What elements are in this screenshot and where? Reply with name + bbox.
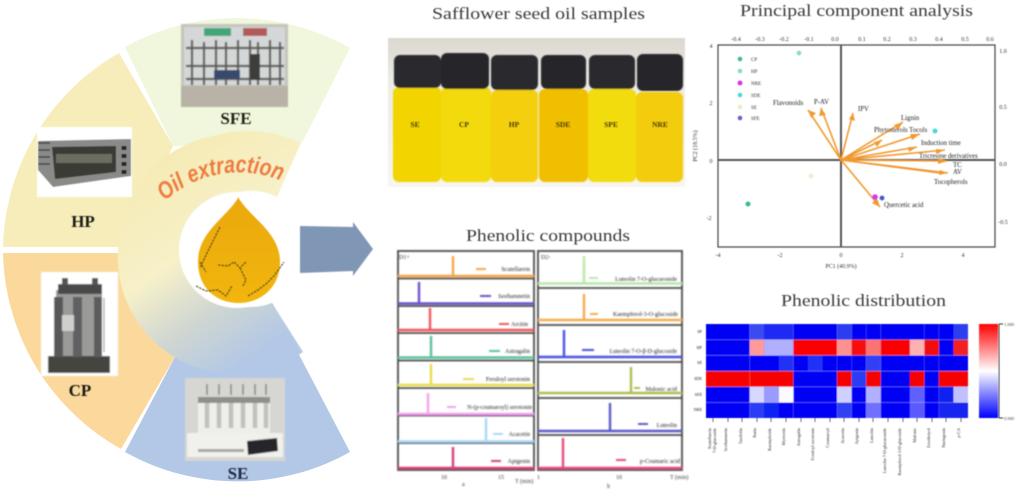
- axis tick labels: PC2 (18.5%): [692, 130, 699, 162]
- chart legend: heatmap colorbar: 0.000: [1004, 416, 1015, 421]
- vial labels: SE: [410, 120, 420, 129]
- title: Phenolic distribution: Phenolic distribution: [781, 291, 947, 310]
- left legends: Isorhamnetin: [498, 294, 530, 300]
- row labels: HP: [697, 345, 703, 350]
- column labels: Malonic: [912, 428, 917, 443]
- vial labels: [410, 120, 668, 129]
- axis tick labels: 0.3: [909, 37, 917, 43]
- right axis labels: [537, 255, 688, 490]
- vial labels: SDE: [556, 120, 570, 129]
- right legends: Luteolin 7-O-glucuronide: [615, 277, 677, 283]
- left legends: N-(p-coumaroyl) serotonin: [467, 404, 532, 411]
- right legends: Luteolin 7-O-β-D-glucoside: [609, 349, 677, 355]
- label: HP: HP: [71, 212, 95, 231]
- photo: HP oven: [37, 127, 132, 197]
- column labels: Feruloyl serotonin: [810, 427, 815, 460]
- left legends: Arctiin: [511, 322, 528, 328]
- left legends: [467, 267, 532, 465]
- chart: phenolic heatmap: [694, 324, 968, 476]
- score points: [797, 51, 801, 55]
- column labels: Scutellarein: [707, 427, 712, 449]
- chart legend: heatmap colorbar: 1.000: [1004, 322, 1015, 327]
- column labels: Apigenin: [854, 427, 859, 444]
- photo background: [388, 38, 685, 187]
- axis tick labels: 2: [710, 101, 712, 107]
- plot frame: [718, 45, 995, 247]
- axis tick labels: PC1 (40.9%): [825, 263, 857, 270]
- sector: HP: [3, 53, 173, 247]
- row labels: SE: [697, 360, 702, 365]
- heatmap row 5: [750, 387, 968, 402]
- sector: SFE: [125, 18, 350, 146]
- axis tick labels: 0.6: [986, 37, 994, 43]
- right legends: p-Coumaric acid: [640, 459, 680, 465]
- axis tick labels: -4: [716, 253, 720, 259]
- axis tick labels: [692, 37, 1008, 270]
- left legends: Scutellarein: [501, 267, 530, 273]
- left legends: Feruloyl serotonin: [486, 377, 530, 383]
- chart: chromatograms left panel: [398, 251, 534, 488]
- right legends: [609, 277, 680, 465]
- column labels: Kaempferide: [767, 428, 772, 451]
- loading labels: Quercetic acid: [884, 202, 924, 209]
- loading labels: Tricresine derivatives: [919, 153, 978, 160]
- heatmap row 4: [706, 371, 968, 387]
- title: Principal component analysis: Principal component analysis: [740, 1, 973, 20]
- axis tick labels: 0: [710, 159, 712, 165]
- right legends: Malonic acid: [646, 387, 677, 393]
- right axis labels: T (min): [670, 474, 688, 481]
- column labels: [707, 427, 961, 476]
- right legends: Kaempferol-3-O-glucoside: [613, 311, 678, 318]
- axis tick labels: -0.2: [779, 37, 789, 43]
- loading labels: IPV: [858, 106, 869, 113]
- vial labels: HP: [509, 120, 520, 129]
- left axis labels: [399, 255, 533, 488]
- arrow: [300, 222, 373, 276]
- icon: oil drop with molecules: [196, 197, 284, 303]
- legend: CP: [751, 58, 757, 63]
- row labels: SDE: [694, 376, 702, 381]
- left axis labels: T (min): [515, 478, 533, 485]
- vial labels: SPE: [604, 120, 618, 129]
- right legend swatches: [582, 278, 648, 460]
- column labels: Astragalin: [796, 427, 801, 446]
- left legends: Acacetin: [509, 432, 530, 438]
- axis tick labels: 4: [710, 44, 712, 50]
- axis tick labels: -2: [778, 253, 782, 259]
- column labels: Naringenin: [941, 427, 946, 448]
- right axis labels: b: [607, 484, 610, 490]
- chart: PCA biplot: [692, 37, 1008, 270]
- title: Safflower seed oil samples: Safflower seed oil samples: [432, 4, 645, 23]
- axis tick labels: 0.5: [961, 37, 969, 43]
- legend: NRE: [751, 82, 761, 87]
- axis tick labels: 0.4: [935, 37, 943, 43]
- legend: [738, 57, 761, 122]
- inner gradient ring: [118, 131, 303, 374]
- vial labels: CP: [459, 120, 469, 129]
- right axis labels: D2-: [541, 255, 550, 261]
- loading labels: TC: [953, 162, 962, 169]
- sector: SE: [125, 303, 350, 481]
- label: SFE: SFE: [220, 109, 252, 128]
- left axis labels: 10: [441, 475, 447, 481]
- heatmap row 3: [779, 355, 881, 371]
- chart: chromatograms right panel: [537, 251, 688, 490]
- axis tick labels: 2: [900, 253, 904, 259]
- loading labels: Phytosterols Tocols: [874, 127, 928, 134]
- axis tick labels: -0.3: [755, 37, 765, 43]
- loading labels: Tocopherols: [934, 179, 968, 186]
- label: CP: CP: [69, 381, 91, 400]
- left axis labels: 15: [498, 475, 504, 481]
- left legends: Astragalin: [505, 349, 530, 355]
- axis tick labels: 0.5: [999, 105, 1007, 111]
- loading labels: Flavonoids: [773, 100, 804, 107]
- column labels: Rutin: [752, 427, 757, 438]
- column labels: Luteolin 7-O-glucuronide: [882, 428, 887, 473]
- legend: SE: [751, 106, 757, 111]
- right axis labels: 10: [616, 475, 622, 481]
- column labels: Acacetin: [840, 427, 845, 444]
- legend: SDE: [751, 94, 760, 99]
- loading labels: Lignin: [901, 115, 920, 122]
- loading labels: P-AV: [814, 99, 829, 106]
- column labels: Eriodictyol: [926, 427, 931, 448]
- heatmap row 6: [750, 402, 968, 418]
- photo: SE extractor: [185, 378, 285, 461]
- heatmap base: [706, 324, 968, 418]
- photo: SFE equipment: [181, 24, 288, 107]
- axis tick labels: 0.1: [858, 37, 866, 43]
- axis tick labels: 4: [962, 253, 964, 259]
- curved title: Oil extraction: Oil extraction: [158, 156, 284, 199]
- column labels: Taxifolin: [738, 427, 743, 444]
- row labels: SP: [697, 329, 703, 334]
- chart legend: heatmap colorbar: [979, 322, 1015, 421]
- right legends: Luteolin: [657, 423, 677, 429]
- arrow heads: [808, 108, 948, 207]
- vial labels: NRE: [652, 120, 668, 129]
- axis tick labels: 1.0: [999, 49, 1007, 55]
- heatmap row 2: [750, 340, 968, 355]
- loading labels: AV: [953, 169, 962, 176]
- left axis labels: D1+: [399, 255, 410, 261]
- column labels: Kaempferol-3-O-glucoside: [897, 428, 902, 476]
- heatmap row 1: [750, 324, 968, 340]
- legend: SFE: [751, 117, 760, 122]
- photo: oil sample vials: [388, 38, 685, 187]
- title: Phenolic compounds: Phenolic compounds: [466, 226, 630, 245]
- left traces: [398, 256, 534, 468]
- column labels: p-CA: [956, 427, 961, 438]
- row labels: SFE: [695, 392, 702, 397]
- loading arrows: [808, 108, 948, 207]
- vials: [393, 53, 683, 182]
- white hub: [179, 192, 295, 308]
- left legend swatches: [447, 269, 509, 461]
- column labels: 7-O-glucoside: [712, 428, 717, 453]
- axis tick labels: 0.0: [831, 37, 839, 43]
- right frame and separators: [538, 251, 682, 470]
- axis tick labels: -0.1: [804, 37, 814, 43]
- sector: CP: [3, 253, 176, 449]
- axis tick labels: -0.4: [731, 37, 741, 43]
- extraction wheel: [3, 18, 350, 483]
- photo: CP press: [41, 272, 118, 376]
- column labels: Isorhamnetin: [723, 427, 728, 451]
- legend: HP: [751, 70, 758, 75]
- row labels: [694, 329, 703, 412]
- row labels: NRE: [694, 407, 702, 412]
- axis tick labels: 0.2: [883, 37, 891, 43]
- zero axes: [718, 45, 995, 247]
- axis tick labels: -0.5: [998, 220, 1008, 226]
- loading labels: [773, 99, 978, 209]
- loading labels: Induction time: [921, 140, 961, 147]
- left legends: Apigenin: [508, 459, 530, 465]
- axis tick labels: 0.0: [999, 162, 1007, 168]
- axis tick labels: 0: [840, 253, 842, 259]
- label: SE: SE: [228, 464, 248, 483]
- right traces: [538, 256, 682, 468]
- right axis labels: 1: [537, 475, 540, 481]
- axis tick labels: -2: [706, 216, 712, 222]
- left axis labels: a: [462, 482, 465, 488]
- left frame and separators: [398, 251, 534, 470]
- column labels: Myricetin: [781, 427, 786, 445]
- column labels: Coumaroyl: [825, 427, 830, 448]
- column labels: Luteolin: [869, 427, 874, 443]
